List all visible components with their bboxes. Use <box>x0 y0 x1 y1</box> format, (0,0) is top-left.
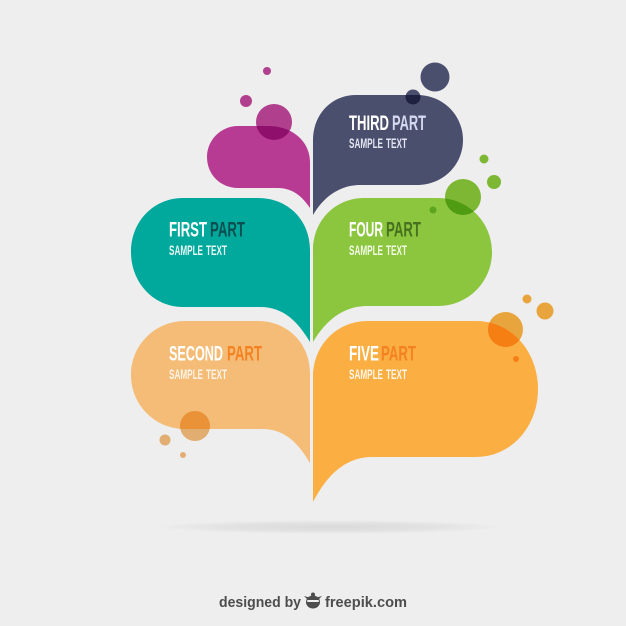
text: second part sample: SAMPLE <box>169 366 203 382</box>
text: third part sample: SAMPLE <box>349 135 383 151</box>
heading: third part: PART <box>392 112 426 135</box>
footer credit: freepik.com <box>325 594 407 611</box>
heading: third part: THIRD <box>349 112 389 135</box>
text: first part sample: SAMPLE <box>169 242 203 258</box>
icon: freepik logo <box>304 592 322 608</box>
text: four part sample: SAMPLE <box>349 242 383 258</box>
text: five part sample: SAMPLE <box>349 366 383 382</box>
text: second part sample: TEXT <box>206 366 227 382</box>
heading: four part: FOUR <box>349 218 383 242</box>
footer credit <box>219 592 407 611</box>
heading: second part: SECOND <box>169 342 223 366</box>
panel: third part bubble <box>313 62 463 215</box>
heading: first part: PART <box>210 218 245 242</box>
panel: first part bubble <box>131 198 310 342</box>
footer credit: designed by <box>219 594 302 611</box>
panel: purple bubble <box>207 67 310 208</box>
heading: four part: PART <box>386 218 421 242</box>
text: five part sample: TEXT <box>386 366 407 382</box>
heading: first part: FIRST <box>169 218 207 242</box>
panel: four part bubble <box>313 154 501 342</box>
infographic canvas <box>130 62 554 610</box>
panel: second part bubble <box>131 321 310 463</box>
ground shadow <box>155 520 505 534</box>
panel: five part bubble <box>313 294 554 502</box>
text: third part sample: TEXT <box>386 135 407 151</box>
text: four part sample: TEXT <box>386 242 407 258</box>
heading: five part: FIVE <box>349 342 379 366</box>
heading: second part: PART <box>227 342 262 366</box>
text: first part sample: TEXT <box>206 242 227 258</box>
heading: five part: PART <box>381 342 416 366</box>
